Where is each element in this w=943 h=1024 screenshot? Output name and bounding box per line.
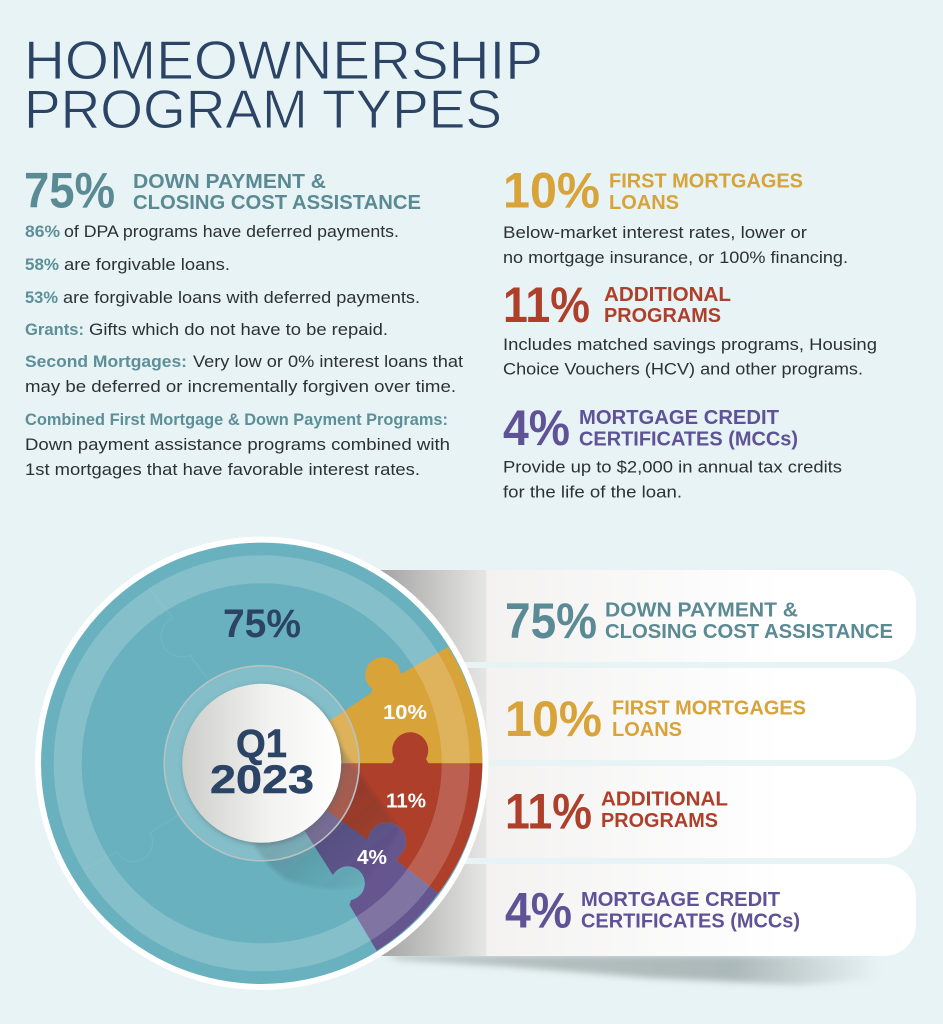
text: grants: Grants:	[25, 321, 84, 339]
bar: 75% down payment	[370, 570, 916, 662]
text: forgivable with deferred: are forgivable loans with deferred payments.	[63, 289, 420, 307]
light ring band	[54, 555, 470, 971]
bar: 4% mortgage credit certificates: MORTGAGE CREDIT	[581, 889, 780, 911]
faint puzzle seams	[83, 587, 207, 870]
heading: additional programs: ADDITIONAL	[604, 284, 731, 306]
center label: Q1	[236, 722, 287, 766]
bar: 75% down payment: DOWN PAYMENT &	[605, 600, 798, 622]
bar: 10% first mortgages: FIRST MORTGAGES	[612, 698, 806, 720]
label: 11%: 11%	[386, 790, 426, 812]
center label: 2023	[210, 758, 314, 802]
stat: 10%: 10%	[503, 162, 600, 218]
panel: down payment and closing cost assistance	[24, 162, 463, 479]
text: first mortgages description	[503, 224, 848, 267]
center label	[210, 722, 314, 802]
heading: first mortgages	[609, 170, 803, 214]
panel: first mortgages	[503, 162, 848, 267]
text: deferred payments: 86%	[25, 223, 60, 241]
bar: 11% additional programs: ADDITIONAL	[601, 788, 728, 810]
bar: 75% down payment: 75%	[505, 593, 597, 649]
center disc shadow	[183, 685, 343, 845]
heading: first mortgages: FIRST MORTGAGES	[609, 170, 803, 192]
heading: down payment: DOWN PAYMENT &	[133, 171, 326, 193]
bar: 4% mortgage credit certificates	[370, 864, 916, 956]
text: second mortgages: Second Mortgages:	[25, 353, 187, 371]
stat: 11%: 11%	[503, 277, 590, 333]
heading: additional programs: PROGRAMS	[604, 305, 721, 327]
text: combined programs: 1st mortgages that have favorable interest rates.	[25, 461, 420, 479]
text: forgivable with deferred: 53%	[25, 289, 58, 307]
bar: 75% down payment: CLOSING COST ASSISTANCE	[605, 621, 893, 643]
label: 10%: 10%	[383, 702, 427, 724]
heading: down payment	[133, 171, 421, 214]
title	[24, 29, 543, 140]
text: additional description: Choice Vouchers (HCV) and other programs.	[503, 360, 863, 378]
stat: 75%: 75%	[24, 162, 115, 218]
text: additional description: Includes matched savings programs, Housing	[503, 336, 877, 354]
text: forgivable loans: are forgivable loans.	[64, 256, 230, 274]
slice: 75% teal	[41, 543, 482, 984]
bar: 10% first mortgages	[370, 668, 916, 760]
bar: 11% additional programs: PROGRAMS	[601, 810, 718, 832]
label: 4%: 4%	[357, 847, 387, 869]
text: combined programs: Combined First Mortgage & Down Payment Programs:	[25, 411, 448, 429]
text: first mortgages description: Below-market interest rates, lower or	[503, 224, 808, 242]
center drop shadow	[253, 737, 400, 889]
title: PROGRAM TYPES	[24, 78, 502, 140]
slice: 10% yellow	[262, 647, 482, 763]
text: forgivable loans: 58%	[25, 256, 59, 274]
text: second mortgages	[25, 353, 463, 396]
heading: additional programs	[604, 284, 731, 327]
slice: 4% purple	[262, 763, 438, 951]
text: grants: Gifts which do not have to be repaid.	[89, 321, 388, 339]
text: credit description	[503, 458, 842, 502]
text: second mortgages: may be deferred or incrementally forgiven over time.	[25, 378, 456, 396]
bar: 11% additional programs: 11%	[505, 784, 592, 840]
bar: 4% mortgage credit certificates: CERTIFICATES (MCCs)	[581, 910, 800, 932]
bar: 10% first mortgages: LOANS	[612, 719, 682, 741]
bar: 10% first mortgages: 10%	[505, 691, 602, 747]
text: credit description: for the life of the loan.	[503, 484, 682, 502]
text: combined programs: Down payment assistance programs combined with	[25, 436, 450, 454]
white outer ring	[35, 537, 488, 990]
heading: mortgage credit certificates: MORTGAGE CREDIT	[579, 407, 779, 429]
bar: 11% additional programs	[370, 766, 916, 858]
glass ring	[164, 666, 359, 861]
heading: down payment: CLOSING COST ASSISTANCE	[133, 192, 421, 214]
center disc	[182, 684, 341, 843]
text: additional description	[503, 336, 877, 378]
slice: 11% red	[262, 732, 482, 893]
text: combined programs	[25, 411, 450, 479]
text: deferred payments: of DPA programs have deferred payments.	[64, 223, 399, 241]
stat: 4%: 4%	[503, 400, 570, 456]
bar: 4% mortgage credit certificates: 4%	[505, 882, 572, 938]
heading: first mortgages: LOANS	[609, 192, 679, 214]
text: first mortgages description: no mortgage insurance, or 100% financing.	[503, 249, 848, 267]
legend bars	[370, 570, 916, 956]
title: HOMEOWNERSHIP	[24, 29, 543, 91]
heading: mortgage credit certificates	[579, 407, 798, 450]
label: 75%: 75%	[223, 602, 301, 646]
text: second mortgages: Very low or 0% interest loans that	[193, 353, 463, 371]
panel: mortgage credit certificates	[503, 400, 842, 502]
text: credit description: Provide up to $2,000 in annual tax credits	[503, 458, 842, 476]
puzzle pie chart	[35, 537, 488, 990]
heading: mortgage credit certificates: CERTIFICATES (MCCs)	[579, 428, 798, 450]
shadow beneath legend bars	[385, 955, 885, 985]
panel: additional programs	[503, 277, 877, 378]
